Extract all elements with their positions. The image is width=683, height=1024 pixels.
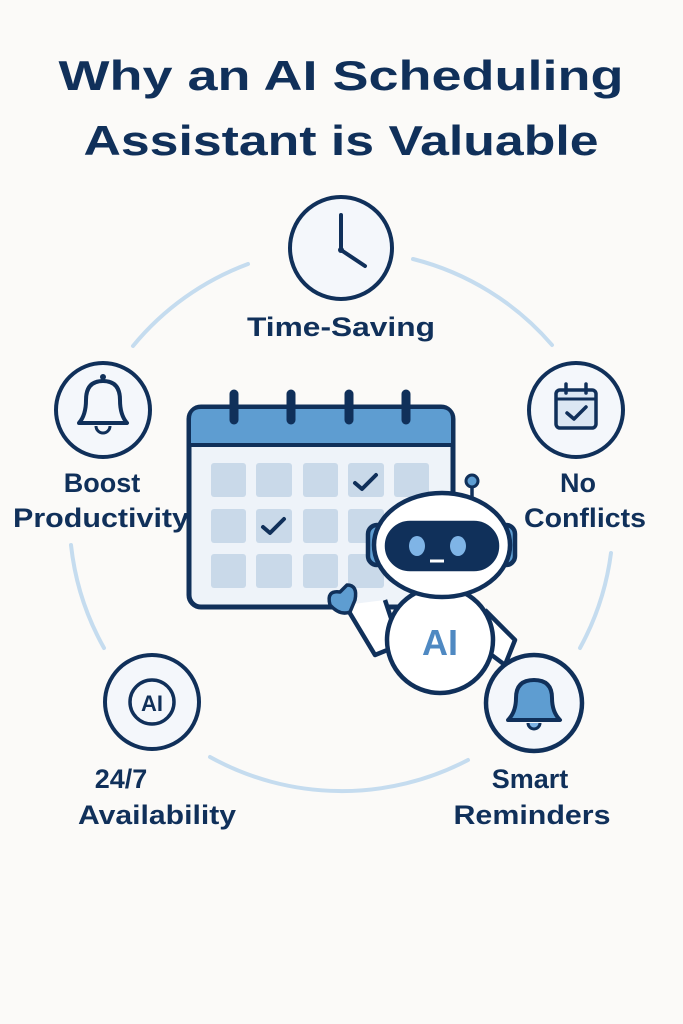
label: No Conflicts: Conflicts <box>524 503 646 533</box>
label: No Conflicts: No <box>560 468 596 498</box>
icon: bell filled <box>486 655 582 751</box>
label: Smart Reminders: Smart <box>492 764 568 794</box>
label: Boost Productivity: Productivity <box>13 503 189 533</box>
label: No Conflicts <box>524 468 646 533</box>
title: Assistant is Valuable <box>84 117 598 164</box>
title <box>58 52 624 164</box>
icon: calendar check <box>529 363 623 457</box>
icon: AI badge <box>105 655 199 749</box>
label: 24/7 Availability: 24/7 <box>95 764 147 794</box>
label: Boost Productivity <box>13 468 189 533</box>
icon: AI badge: AI <box>141 691 163 716</box>
robot: AI <box>422 622 458 663</box>
label: 24/7 Availability: Availability <box>78 800 236 830</box>
icon: clock <box>290 197 392 299</box>
ring arcs <box>71 259 611 791</box>
label: 24/7 Availability <box>78 764 236 830</box>
label: Boost Productivity: Boost <box>64 468 140 498</box>
label: Time-Saving: Time-Saving <box>247 312 435 342</box>
calendar <box>189 394 453 607</box>
label: Smart Reminders: Reminders <box>454 800 610 830</box>
icon: bell outline <box>56 363 150 457</box>
robot <box>329 475 515 693</box>
title: Why an AI Scheduling <box>58 52 624 99</box>
label: Smart Reminders <box>454 764 610 830</box>
